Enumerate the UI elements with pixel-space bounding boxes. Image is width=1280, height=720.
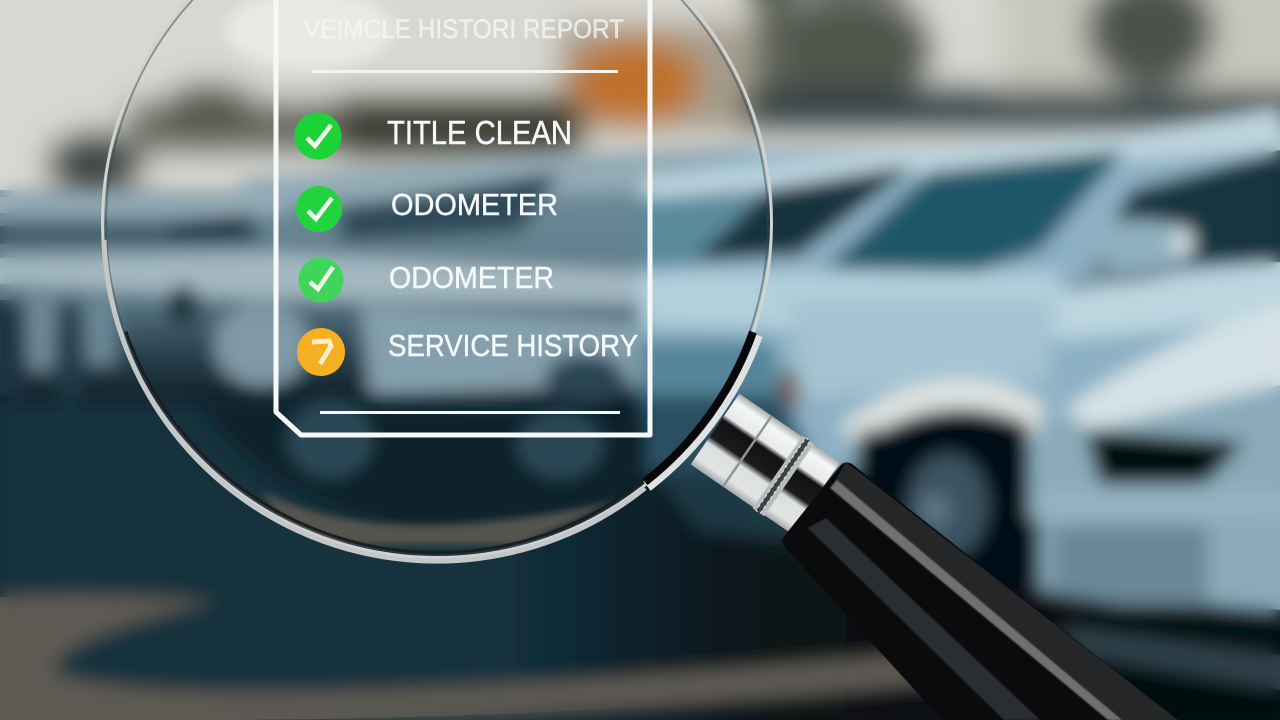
row: odometer <box>296 186 558 232</box>
report card outline <box>276 0 650 435</box>
lens rim <box>102 0 772 558</box>
row: odometer: ODOMETER <box>391 187 558 222</box>
magnifying glass lens <box>102 0 772 561</box>
handle <box>690 393 1178 720</box>
handle grip <box>782 462 1178 720</box>
row: service history <box>297 328 638 376</box>
rim: thick lower-right segment <box>647 335 757 486</box>
row: title clean: TITLE CLEAN <box>387 114 572 151</box>
row: title clean <box>294 112 572 160</box>
title: VEIMCLE HISTORI REPORT <box>304 14 624 44</box>
row: odometer second <box>298 258 554 302</box>
row: service history: SERVICE HISTORY <box>388 328 638 363</box>
ferrule <box>690 393 840 534</box>
row: odometer second: ODOMETER <box>389 260 554 295</box>
